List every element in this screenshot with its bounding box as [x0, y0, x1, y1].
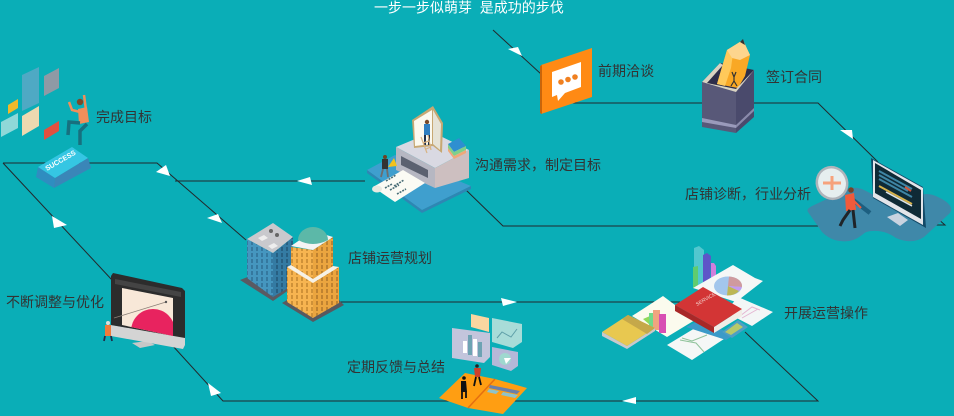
- icon: feedback folder and charts: [439, 314, 527, 414]
- icon: design monitor: [104, 273, 185, 353]
- label: 店铺运营规划: 店铺运营规划: [348, 250, 432, 266]
- label: 前期洽谈: 前期洽谈: [598, 63, 654, 79]
- icon: pencil cup: [702, 39, 754, 133]
- label: 定期反馈与总结: 定期反馈与总结: [347, 359, 445, 375]
- icon: orange chat panel: [540, 48, 592, 114]
- direction arrows: [52, 47, 853, 404]
- icon: printer with open book: [367, 106, 471, 213]
- icon: office buildings: [240, 223, 344, 322]
- icon: reports and charts: SERVICE: [695, 291, 718, 308]
- label: 不断调整与优化: 不断调整与优化: [6, 294, 104, 310]
- label: 开展运营操作: 开展运营操作: [784, 305, 868, 321]
- label: 签订合同: 签订合同: [766, 69, 822, 85]
- label: 完成目标: 完成目标: [96, 109, 152, 125]
- label: 沟通需求，制定目标: 沟通需求，制定目标: [475, 157, 601, 173]
- icon: success block and jumping person: SUCCESS: [44, 150, 78, 173]
- label: 店铺诊断，行业分析: 店铺诊断，行业分析: [685, 186, 811, 202]
- icon: monitor and magnifier: [808, 158, 951, 241]
- icon: reports and charts: [602, 246, 773, 360]
- icon: success block and jumping person: [1, 67, 91, 188]
